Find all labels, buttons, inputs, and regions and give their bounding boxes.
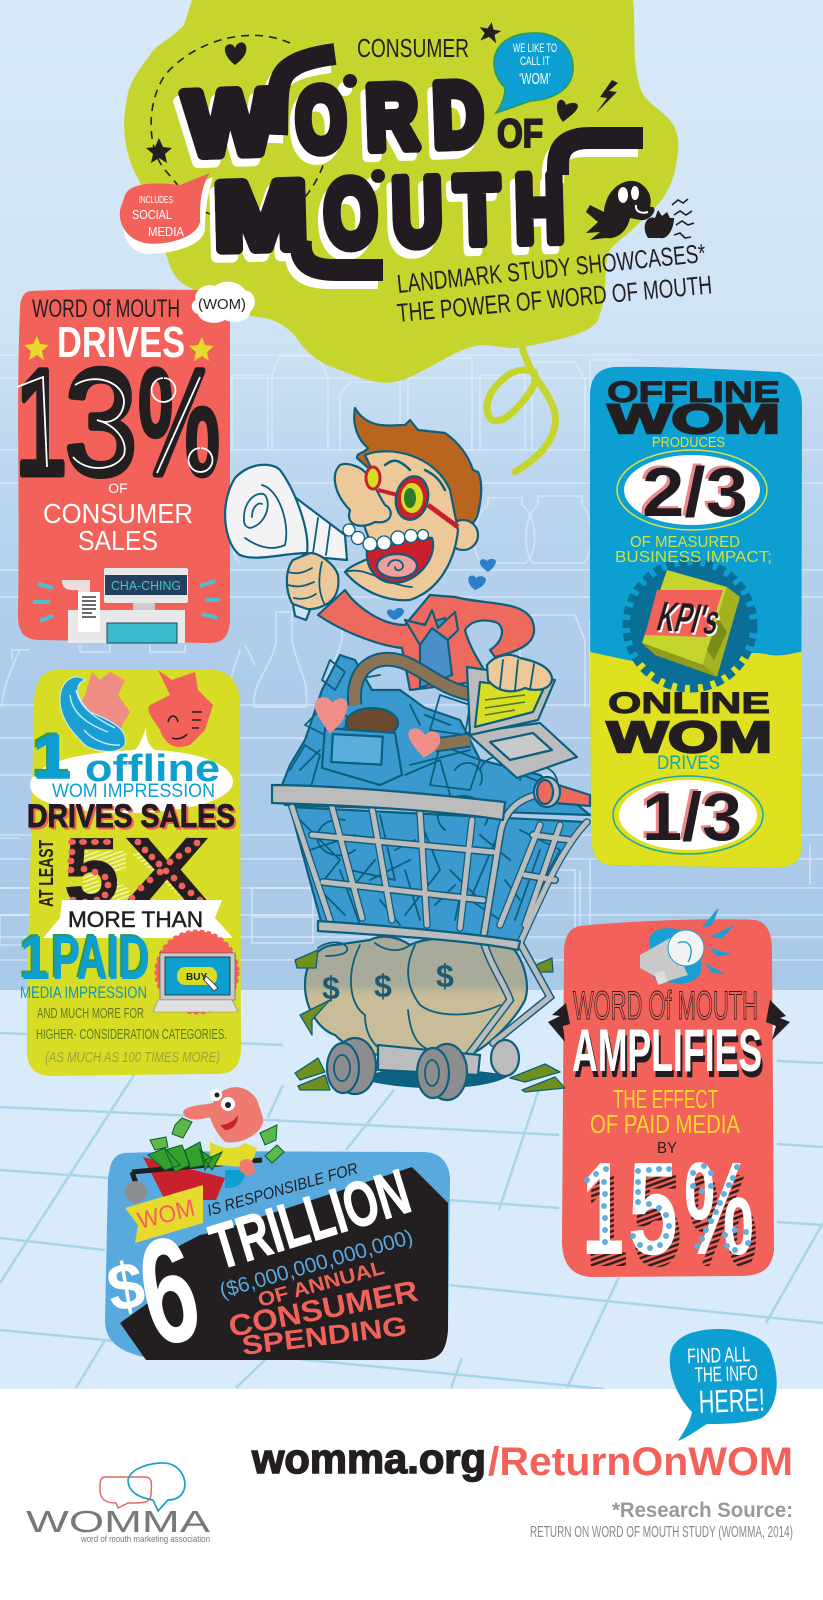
of measured business impact — [615, 534, 772, 566]
trillion: TRILLION — [202, 1155, 418, 1283]
money bags: $ — [374, 968, 392, 1004]
spilled money — [295, 950, 565, 1092]
ribbon: more than — [43, 900, 233, 938]
megaphone — [225, 465, 347, 560]
panel: offline and online WOM — [590, 367, 802, 868]
url: womma.org/ReturnOnWOM: womma.org — [251, 1435, 486, 1482]
the effect of paid media: OF PAID MEDIA — [590, 1109, 741, 1139]
media impression: MEDIA IMPRESSION — [20, 983, 147, 1002]
logo: WOMMA — [26, 1463, 210, 1545]
ear — [448, 520, 478, 550]
heading: consumer: CONSUMER — [357, 33, 469, 63]
monitor and hearts in cart — [316, 698, 440, 785]
subtitle: THE POWER OF WORD OF MOUTH — [396, 269, 713, 328]
callout: includes social media — [120, 173, 213, 254]
money bags: $ — [436, 958, 454, 994]
the effect of paid media: THE EFFECT — [613, 1084, 718, 1114]
ellipse 1/3: 1/3 — [642, 779, 742, 855]
icon: black bolts — [548, 1000, 790, 1042]
online wom: ONLINE — [608, 687, 770, 720]
illustration: man with megaphone pushing shopping cart — [225, 408, 590, 1100]
callout: we like to call it WOM: ‘WOM’ — [519, 71, 551, 88]
5X with dots — [64, 819, 218, 925]
drives: DRIVES — [657, 753, 720, 774]
wheels — [327, 1038, 519, 1100]
cart basket contents — [290, 796, 585, 945]
WOM cloud — [192, 282, 255, 323]
callout: find all the info here: FIND ALL — [687, 1343, 751, 1368]
5X with dots: X — [124, 819, 210, 925]
of measured business impact: BUSINESS IMPACT; — [615, 549, 772, 566]
body copy — [36, 1005, 227, 1066]
flourish on W — [277, 54, 335, 135]
title blob: green splash — [124, 0, 678, 472]
icon: KPI box on seal: KPI's — [652, 593, 725, 643]
offline wom: OFFLINE — [607, 376, 780, 409]
$6 — [102, 1203, 212, 1378]
numeral 1 paid: 1 — [20, 924, 50, 993]
numeral 1 offline: 1 — [33, 723, 71, 792]
callout: find all the info here: HERE! — [698, 1382, 765, 1420]
13 percent figure: % — [138, 338, 220, 506]
ribbon: more than: MORE THAN — [68, 907, 203, 932]
decorative dashed orbit — [151, 35, 325, 226]
callout: we like to call it WOM: WE LIKE TO — [513, 43, 557, 55]
background: tiled floor — [0, 990, 823, 1390]
13 percent figure: 3 — [65, 338, 137, 506]
callout: we like to call it WOM — [494, 33, 573, 113]
panel: 13 percent of consumer sales — [15, 282, 255, 643]
ribbon: WOM: WOM — [135, 1195, 198, 1235]
$6: $ — [102, 1247, 150, 1326]
word: W — [183, 72, 277, 175]
15 percent figure: % — [684, 1135, 754, 1282]
body copy: (AS MUCH AS 100 TIMES MORE) — [45, 1049, 220, 1066]
money bags: $ — [322, 970, 340, 1006]
of consumer sales: SALES — [78, 525, 158, 556]
15 percent figure: 1 — [582, 1135, 624, 1282]
mouth: M — [213, 162, 309, 271]
subtitle — [396, 238, 713, 328]
money bags — [305, 937, 527, 1061]
of measured business impact: OF MEASURED — [630, 534, 740, 551]
callout: includes social media: INCLUDES — [139, 195, 173, 206]
by: BY — [657, 1140, 677, 1157]
mouth: H — [514, 155, 565, 263]
mouth: T — [454, 157, 501, 264]
callout: find all the info here: THE INFO — [694, 1362, 758, 1387]
hair — [354, 408, 481, 540]
wom impression: WOM IMPRESSION — [52, 781, 215, 802]
lead line: WORD Of MOUTH — [32, 295, 180, 323]
stars — [24, 336, 214, 361]
panel: offline and online WOM: WOM — [608, 396, 780, 442]
research source note: *Research Source: — [612, 1499, 793, 1522]
callout: includes social media: SOCIAL — [132, 207, 172, 222]
cart wireframe — [272, 785, 587, 1057]
15 percent figure: 5 — [632, 1147, 682, 1294]
mouth: O — [323, 160, 379, 268]
fist — [287, 553, 338, 620]
callout: we like to call it WOM: CALL IT — [520, 56, 550, 68]
subtitle: LANDMARK STUDY SHOWCASES* — [396, 238, 707, 299]
15 percent figure — [582, 1135, 758, 1294]
heading: of: OF — [497, 112, 543, 156]
icon: cash register: CHA-CHING — [111, 578, 181, 593]
ellipse 2/3 — [617, 450, 767, 531]
head — [345, 451, 458, 600]
5X with dots: 5 — [64, 819, 119, 925]
hand on laptop — [487, 655, 552, 691]
blue hearts — [387, 559, 496, 620]
cart handle — [534, 777, 590, 807]
research source note — [530, 1499, 793, 1541]
logo: WOMMA: word of mouth marketing association — [80, 1534, 210, 1545]
ellipse 2/3: 2/3 — [642, 453, 748, 531]
15 percent figure: 5 — [628, 1135, 678, 1282]
icon: laptop with buy button — [153, 931, 238, 1013]
nose — [335, 464, 391, 526]
body copy: HIGHER- CONSIDERATION CATEGORIES. — [36, 1026, 227, 1043]
panel: word of mouth amplifies 15 percent — [548, 909, 790, 1294]
url: womma.org/ReturnOnWOM — [251, 1435, 793, 1484]
at least: AT LEAST — [36, 840, 58, 907]
mouth — [343, 524, 433, 587]
mouth: U — [391, 159, 444, 266]
black extrusion — [120, 1167, 448, 1360]
the effect of paid media — [590, 1084, 741, 1139]
word: R — [364, 67, 420, 169]
of consumer sales: OF — [108, 480, 128, 496]
annual consumer spending — [226, 1257, 421, 1361]
produces: PRODUCES — [652, 434, 725, 451]
panel: offline WOM impression drives sales 5X — [20, 669, 241, 1076]
logo: WOMMA: WOMMA — [26, 1504, 210, 1539]
speech bubble — [30, 728, 233, 813]
offline: offline — [85, 748, 220, 790]
body copy: AND MUCH MORE FOR — [37, 1005, 144, 1022]
panel: footer white band — [0, 1389, 823, 1600]
background: store wall — [0, 0, 823, 992]
laptop — [467, 667, 577, 778]
15 percent figure: % — [688, 1147, 758, 1294]
word: D — [431, 65, 485, 167]
icon: heart characters — [60, 670, 213, 751]
is responsible for: IS RESPONSIBLE FOR — [205, 1160, 360, 1220]
13 percent figure: 1 — [15, 338, 67, 506]
15 percent figure: 1 — [586, 1147, 628, 1294]
icon: megaphone — [640, 909, 733, 985]
annual consumer spending: OF ANNUAL — [256, 1257, 387, 1312]
callout: find all the info here — [670, 1329, 777, 1441]
background: shelves with products — [0, 355, 823, 960]
word: O — [294, 70, 348, 171]
bag strap — [346, 659, 475, 745]
annual consumer spending: CONSUMER — [226, 1275, 421, 1344]
of consumer sales: CONSUMER — [43, 498, 193, 529]
icon: cash register — [33, 568, 220, 643]
full amount: ($6,000,000,000,000) — [217, 1226, 416, 1303]
icon: stars, hearts and bolt — [146, 20, 618, 163]
drives: DRIVES — [57, 318, 185, 367]
numeral 1 paid: PAID — [52, 924, 150, 993]
annual consumer spending: SPENDING — [240, 1311, 408, 1361]
icon: KPI box on seal — [627, 562, 753, 688]
heading: word of mouth lettering — [183, 54, 643, 271]
jacket and shirt — [318, 590, 534, 690]
mascot: black head shouting — [586, 181, 694, 240]
callout: includes social media: MEDIA — [148, 224, 184, 239]
flourishes on M, H and O balls — [301, 74, 643, 270]
panel: WOM responsible for six trillion — [102, 1087, 450, 1378]
ellipse 1/3 — [613, 776, 763, 855]
heap of goods — [278, 655, 590, 815]
character with wheelbarrow of money — [125, 1087, 284, 1203]
WOM cloud: (WOM) — [198, 296, 246, 313]
panel: offline and online WOM: WOM — [607, 713, 772, 762]
$6: 6 — [125, 1203, 212, 1378]
ribbon: WOM — [125, 1185, 203, 1243]
glasses — [366, 461, 458, 527]
drives sales: DRIVES SALES — [27, 798, 235, 834]
icon: laptop with buy button: BUY — [186, 972, 207, 983]
url: womma.org/ReturnOnWOM: /ReturnOnWOM — [488, 1440, 793, 1484]
